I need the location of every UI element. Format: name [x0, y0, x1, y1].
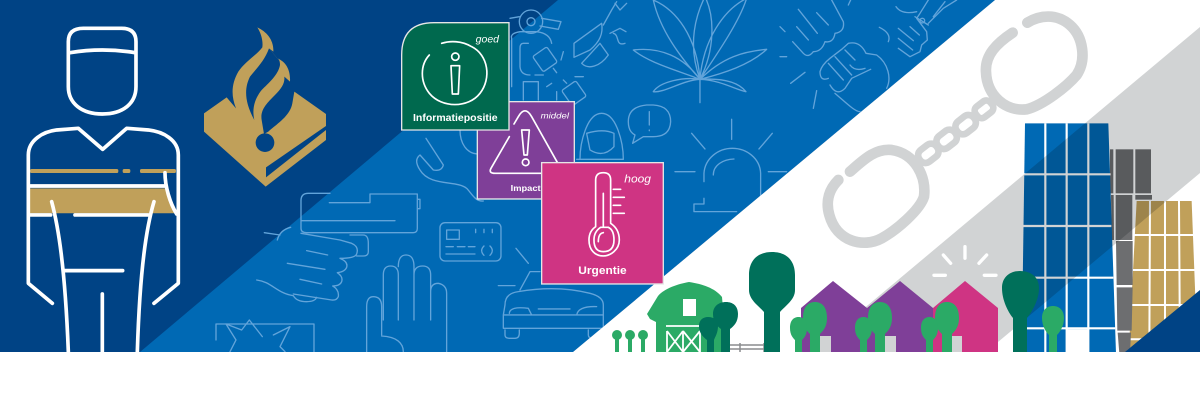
icon: hand holding knife	[879, 0, 957, 57]
upper cuff	[986, 17, 1082, 110]
uniform gold stripes	[30, 169, 176, 213]
pink house	[933, 281, 998, 352]
emblem gold silhouette	[204, 27, 326, 187]
emblem book page stripe	[266, 126, 326, 177]
icon: warning triangle	[490, 111, 561, 173]
icon: information	[422, 42, 487, 105]
house doors	[820, 336, 962, 352]
officer body	[28, 128, 178, 352]
grey building	[1110, 149, 1152, 353]
officer head	[68, 28, 136, 114]
lower cuff	[828, 150, 924, 243]
rating: goed: goed	[476, 34, 500, 45]
line art: crime icons	[216, 0, 957, 352]
icon: pistol in hand	[257, 193, 420, 302]
white strip below banner	[0, 352, 1200, 403]
emblem flame gap	[246, 48, 280, 120]
icon: bank card	[440, 223, 501, 261]
icon: broken window	[216, 320, 314, 352]
rating: middel: middel	[541, 111, 570, 121]
police officer figure	[28, 28, 178, 352]
icon: thermometer	[589, 173, 624, 256]
background: light blue diagonal	[140, 0, 995, 352]
icon: police siren	[675, 119, 787, 212]
fence	[730, 343, 765, 352]
icon: speech bubble with exclamation	[628, 105, 671, 143]
card: impact	[477, 102, 574, 199]
logo: police flame emblem	[204, 27, 326, 187]
icon: car	[498, 248, 603, 338]
handcuffs	[828, 17, 1082, 243]
label: Informatiepositie: Informatiepositie	[413, 113, 498, 124]
blue tower	[1022, 123, 1116, 353]
office buildings	[1022, 123, 1197, 353]
card: informatiepositie	[402, 23, 509, 130]
white diagonal band	[573, 0, 1200, 352]
rating: hoog: hoog	[624, 174, 652, 186]
barn	[647, 282, 724, 352]
icon: hooded figure	[577, 113, 623, 159]
houses	[801, 281, 998, 352]
small trees left of barn	[612, 330, 648, 352]
icon: open hand	[780, 0, 851, 57]
chain links	[915, 98, 995, 166]
dark green trees	[699, 252, 1039, 352]
trees in front of houses	[790, 302, 1064, 352]
icon: bolt cutter	[574, 2, 627, 67]
emblem dot	[256, 133, 274, 152]
icon: raised hand	[367, 255, 447, 352]
icon: hook	[417, 130, 483, 201]
label: Impact: Impact	[511, 183, 541, 193]
grey diagonal band	[812, 27, 1200, 352]
label: Urgentie: Urgentie	[578, 265, 627, 277]
barn window	[683, 299, 696, 316]
icon: clenched fist	[791, 43, 889, 112]
dark blue corner	[1125, 290, 1200, 352]
sunburst above pink house	[934, 247, 996, 275]
icon: cannabis leaf	[633, 0, 767, 103]
barn door	[666, 326, 702, 352]
purple houses	[801, 281, 933, 352]
score cards	[402, 23, 663, 284]
card: urgentie	[542, 163, 663, 284]
gold building	[1129, 201, 1197, 353]
icon: scooter and stolen goods	[510, 10, 586, 106]
